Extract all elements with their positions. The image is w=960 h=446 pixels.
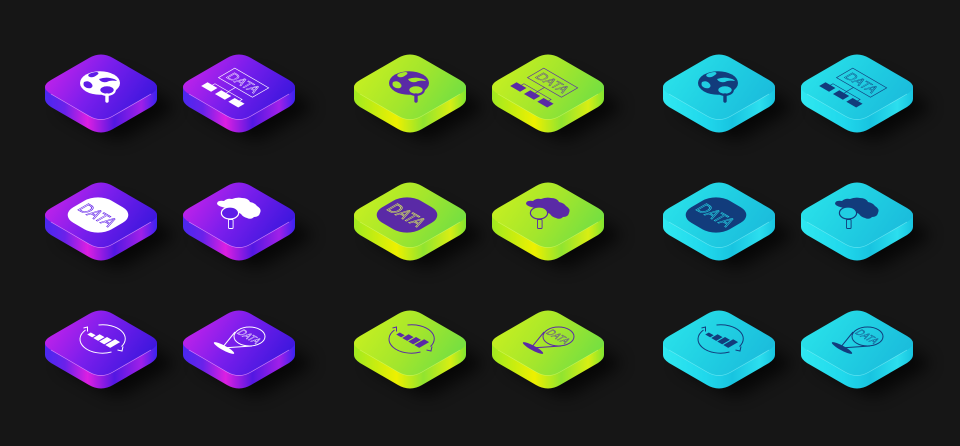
icon: globe with magnifier [698,71,738,101]
icon: globe with magnifier [389,71,429,101]
icon: data location pin: DATA [852,329,882,346]
tile: purple data card [45,182,173,268]
tile: green data card [354,182,482,268]
icon: bars with cycle arrows [389,325,434,353]
tile: cyan data card [663,182,791,268]
tile: purple data pin [183,310,311,396]
icon: data hierarchy: DATA [532,70,574,95]
icon: cloud with magnifier [526,198,570,228]
icon: data card: DATA [382,201,431,229]
icon: data hierarchy: DATA [841,70,883,95]
tile: cyan globe search [663,54,791,140]
icon: data location pin: DATA [543,329,573,346]
icon: cloud with magnifier [835,198,879,228]
tile: purple globe search [45,54,173,140]
tile: purple cloud search [183,182,311,268]
tile: green data pin [492,310,620,396]
icon: data location pin: DATA [234,329,264,346]
tile: green data flowchart [492,54,620,140]
tile: cyan cloud search [801,182,929,268]
icon: cloud with magnifier [217,198,261,228]
tile: green chart refresh [354,310,482,396]
icon: data hierarchy: DATA [223,70,265,95]
icon: data card: DATA [73,201,122,229]
tile: cyan chart refresh [663,310,791,396]
tile: cyan data pin [801,310,929,396]
icon: globe with magnifier [80,71,120,101]
icon: data card: DATA [691,201,740,229]
tile: purple chart refresh [45,310,173,396]
tile: purple data flowchart [183,54,311,140]
tile: cyan data flowchart [801,54,929,140]
icon: bars with cycle arrows [80,325,125,353]
tile: green cloud search [492,182,620,268]
tile: green globe search [354,54,482,140]
icon: bars with cycle arrows [698,325,743,353]
